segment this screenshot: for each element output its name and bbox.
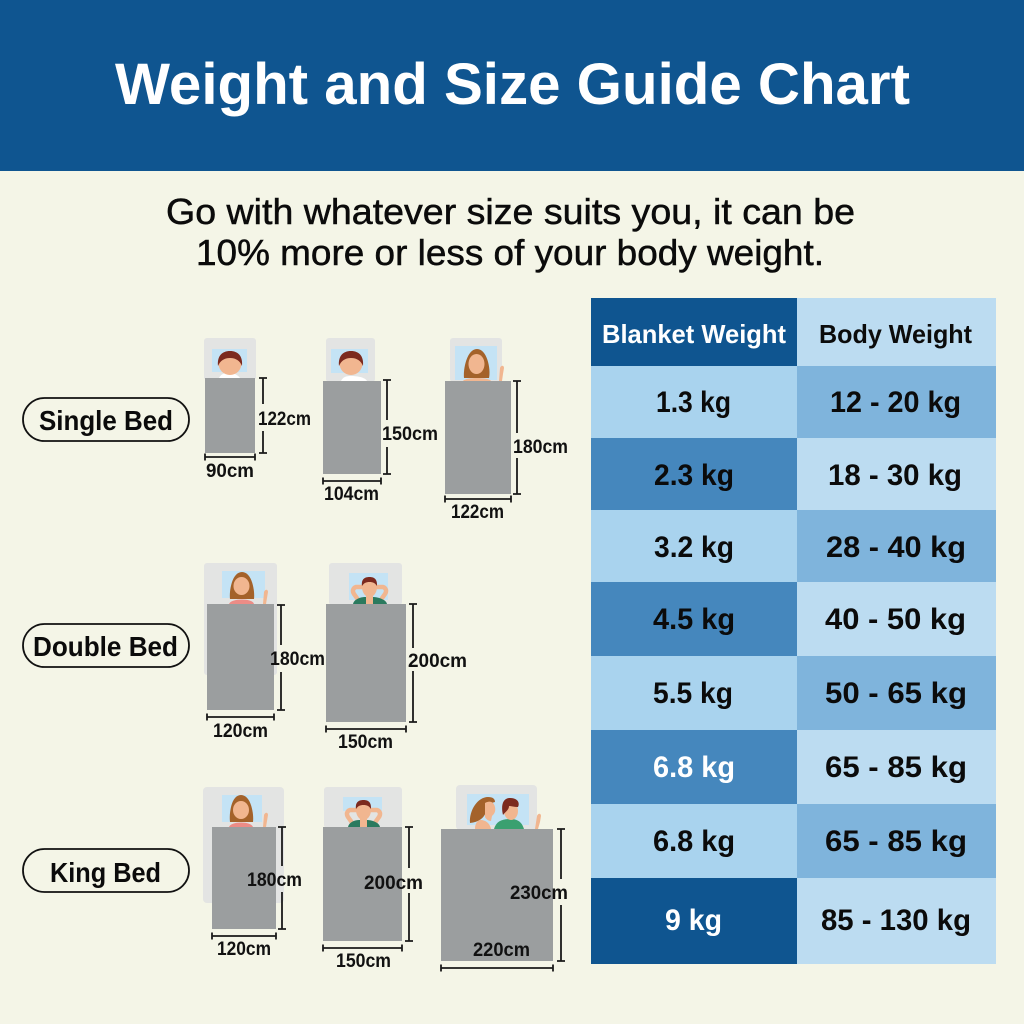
king bed 150 x 200: 200cm xyxy=(364,873,423,894)
single bed 90 x 122: 90cm xyxy=(206,461,254,482)
row 2: 2.3 kg xyxy=(654,459,734,492)
row 4 xyxy=(591,582,996,656)
row 8 xyxy=(591,878,996,964)
single bed 90 x 122: 122cm xyxy=(258,409,311,430)
subtitle xyxy=(166,191,855,273)
title: Weight and Size Guide Chart xyxy=(115,52,910,117)
pill: single bed xyxy=(23,398,189,441)
double bed 120 x 180 xyxy=(204,563,325,742)
king bed 150 x 200 xyxy=(323,787,423,972)
pill: king bed xyxy=(23,849,189,892)
row 4: 40 - 50 kg xyxy=(825,603,966,636)
row 6: 6.8 kg xyxy=(653,751,735,784)
row 4: 4.5 kg xyxy=(653,603,735,636)
row 1: 1.3 kg xyxy=(656,386,731,419)
king bed 220 x 230: 230cm xyxy=(510,883,568,904)
sleeper: boy xyxy=(218,351,242,378)
row 6 xyxy=(591,730,996,804)
row 6: 65 - 85 kg xyxy=(825,751,967,784)
single bed 90 x 122 xyxy=(204,338,311,482)
single bed 122 x 180: 180cm xyxy=(513,437,568,458)
single bed 104 x 150 xyxy=(323,338,438,505)
sleepers: couple xyxy=(470,797,541,829)
row 2 xyxy=(591,438,996,510)
double bed 150 x 200 xyxy=(326,563,467,753)
pill: double bed: Double Bed xyxy=(33,631,178,662)
sleeper: woman xyxy=(229,572,268,604)
row 3: 28 - 40 kg xyxy=(826,531,966,564)
single bed 104 x 150: 150cm xyxy=(382,424,438,445)
row 8: 9 kg xyxy=(665,904,722,937)
row 7 xyxy=(591,804,996,878)
row 3 xyxy=(591,510,996,582)
row 2: 18 - 30 kg xyxy=(828,459,962,492)
table header xyxy=(591,298,996,366)
row 1: 12 - 20 kg xyxy=(830,386,961,419)
king bed 120 x 180: 120cm xyxy=(217,939,271,960)
double bed 120 x 180: 120cm xyxy=(213,721,268,742)
row 3: 3.2 kg xyxy=(654,531,734,564)
row 7: 65 - 85 kg xyxy=(825,825,967,858)
row 5 xyxy=(591,656,996,730)
sleeper: boy xyxy=(339,351,367,381)
size table xyxy=(591,298,996,964)
king bed 220 x 230: 220cm xyxy=(473,940,530,961)
table header: Blanket Weight xyxy=(602,319,786,349)
subtitle: 10% more or less of your body weight. xyxy=(196,232,824,273)
row 5: 50 - 65 kg xyxy=(825,677,967,710)
king bed 120 x 180 xyxy=(203,787,302,960)
row 5: 5.5 kg xyxy=(653,677,733,710)
pill: king bed: King Bed xyxy=(50,857,161,888)
sleeper: woman xyxy=(463,349,504,381)
pill: double bed xyxy=(23,624,189,667)
pill: single bed: Single Bed xyxy=(39,405,173,436)
king bed 150 x 200: 150cm xyxy=(336,951,391,972)
sleeper: man with arms behind head xyxy=(353,577,387,604)
double bed 150 x 200: 200cm xyxy=(408,651,467,672)
double bed 120 x 180: 180cm xyxy=(270,649,325,670)
sleeper: man with arms behind head xyxy=(347,800,380,827)
single bed 122 x 180: 122cm xyxy=(451,502,504,523)
row 1 xyxy=(591,366,996,438)
table header: Body Weight xyxy=(819,319,972,349)
king bed 120 x 180: 180cm xyxy=(247,870,302,891)
title banner xyxy=(0,0,1024,171)
single bed 122 x 180 xyxy=(445,338,568,523)
double bed 150 x 200: 150cm xyxy=(338,732,393,753)
king bed 220 x 230 xyxy=(441,785,568,972)
row 8: 85 - 130 kg xyxy=(821,904,971,937)
row 7: 6.8 kg xyxy=(653,825,735,858)
single bed 104 x 150: 104cm xyxy=(324,484,379,505)
subtitle: Go with whatever size suits you, it can be xyxy=(166,191,855,232)
sleeper: woman xyxy=(229,795,268,827)
